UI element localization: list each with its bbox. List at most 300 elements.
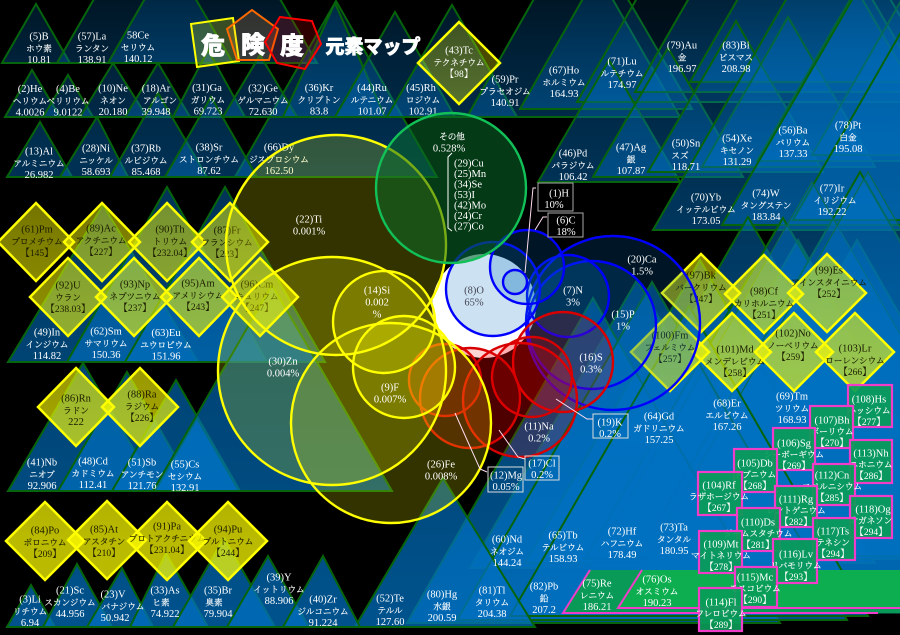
box: (113)Nh [850, 440, 892, 483]
triangle: (67)Ho [520, 0, 692, 109]
box: (106)Sg [764, 428, 824, 472]
diamond: (96)Cm [222, 258, 298, 336]
diamond: (99)Es: アインスタイニウム [791, 277, 867, 287]
box: (107)Bh: ボーリウム [811, 427, 853, 437]
title text: 元素マップ [325, 36, 421, 58]
label: (46)Pd: 106.42 [559, 172, 587, 183]
title badge: yellow square: 危 [201, 33, 225, 60]
callout: (17)Cl: 0.2% [531, 470, 553, 481]
callout: (12)Mg [455, 413, 523, 493]
label: (22)Ti: (22)Ti [296, 214, 322, 226]
label: 58Ce: セリウム [121, 42, 155, 52]
label: (64)Gd: 157.25 [645, 435, 673, 446]
diamond: (101)Md [693, 313, 771, 391]
diamond: (100)Fm [631, 313, 709, 391]
box: (111)Rg: 【282】 [779, 517, 813, 528]
triangle: (45)Rh [387, 5, 517, 117]
label: list of other elements: (53)I [454, 190, 475, 201]
diamond: (87)Fr: 【223】 [210, 249, 244, 260]
triangle: (71)Lu [577, 0, 900, 102]
label: other: 0.528% [433, 144, 465, 154]
label: other: その他 [439, 130, 465, 142]
label: (3)Li: 6.94 [21, 618, 40, 629]
box: (108)Hs [848, 385, 892, 428]
label: (72)Hf: 178.49 [608, 550, 636, 561]
diamond: (88)Ra [102, 368, 178, 446]
label: (70)Yb: 173.05 [692, 216, 720, 227]
diamond: (96)Cm: キュリウム [236, 291, 278, 301]
diamond: (101)Md: 【258】 [718, 368, 752, 379]
box: (108)Hs: ハッシウム [848, 406, 890, 416]
triangle: (74)W [722, 0, 900, 225]
label: (5)B: 10.81 [27, 55, 51, 66]
label: (2)He: 4.0026 [16, 108, 44, 119]
label: (23)V: 50.942 [101, 613, 129, 624]
callout: (12)Mg: (12)Mg [490, 470, 523, 482]
diamond: (99)Es [788, 254, 867, 332]
triangle: (13)Al [7, 122, 72, 177]
box: (112)Cn: (112)Cn [815, 470, 850, 482]
triangle: (72)Hf [585, 218, 900, 559]
label: (65)Tb: (65)Tb [548, 530, 578, 542]
diamond: (92)U: (92)U [55, 280, 81, 292]
label: (73)Ta: タンタル [657, 534, 691, 544]
triangle: small overlap [155, 418, 239, 491]
label: (82)Pb: 鉛 [540, 592, 549, 603]
diamond: (103)Lr [816, 313, 894, 391]
diamond: (85)At: 【210】 [87, 548, 121, 559]
label: (23)V: バナジウム [102, 601, 144, 611]
box: (115)Mc [729, 567, 781, 607]
label: (47)Ag: (47)Ag [616, 142, 647, 154]
label: (47)Ag: 107.87 [617, 166, 645, 177]
box: (111)Rg: レントゲニウム [766, 506, 826, 516]
label: (80)Hg: 水銀 [433, 600, 451, 611]
label: (68)Er: エルビウム [706, 410, 748, 420]
callout: (17)Cl: (17)Cl [528, 458, 556, 470]
label: (76)Os: オスミウム [636, 586, 678, 596]
diamond: (43)Tc [418, 22, 500, 104]
label: (22)Ti: 0.001% [293, 226, 325, 238]
label: (21)Sc: スカンジウム [44, 597, 96, 607]
box: (118)Og: (118)Og [855, 504, 891, 516]
triangle: (82)Pb [510, 306, 868, 616]
label: (59)Pr: 140.91 [491, 98, 519, 109]
label: (77)Ir: 192.22 [818, 207, 846, 218]
circle: (7)N [527, 255, 609, 337]
label: (38)Sr: 87.62 [197, 166, 221, 177]
box: (113)Nh: (113)Nh [853, 448, 889, 460]
circles red [409, 312, 613, 457]
label: (20)Ca: 1.5% [631, 266, 653, 278]
box: (118)Og: オガネソン [850, 516, 892, 526]
diamond: (85)At: (85)At [90, 524, 118, 536]
label: (44)Ru: 101.07 [358, 107, 386, 118]
label: (52)Te: (52)Te [376, 594, 404, 604]
circle: other elements [376, 113, 526, 263]
label: (57)La: ランタン [75, 43, 109, 53]
triangle: (44)Ru [335, 12, 455, 117]
label: (18)Ar: 39.948 [142, 107, 170, 118]
triangle: (54)Xe [702, 17, 875, 167]
label: (59)Pr: プラセオジム [479, 86, 531, 96]
label: (45)Rh: ロジウム [406, 95, 440, 105]
label: (51)Sb: 121.76 [128, 481, 156, 492]
triangle: (41)Nb [8, 363, 158, 491]
circle: (1)H [503, 270, 527, 294]
circle: (11)Na [463, 343, 577, 457]
label: (39)Y: イットリウム [253, 584, 305, 594]
label: (76)Os: (76)Os [642, 574, 672, 586]
label: (15)P: (15)P [611, 310, 635, 320]
label: (68)Er: 167.26 [713, 422, 741, 433]
label: (10)Ne: ネオン [100, 95, 126, 105]
diamond: (86)Rn: (86)Rn [61, 394, 92, 404]
label: (50)Sn: (50)Sn [672, 138, 701, 150]
diamond: (102)No: ノーベリウム [767, 340, 819, 350]
label: (83)Bi: 208.98 [722, 64, 750, 75]
diamond: (61)Pm: (61)Pm [21, 224, 53, 236]
circle labels [267, 130, 657, 482]
diamond: (90)Th: 【232.04】 [147, 248, 193, 259]
circles yellow [218, 135, 491, 523]
label: (54)Xe: キセノン [720, 145, 754, 155]
label: (75)Re: (75)Re [582, 578, 612, 590]
label: (63)Eu: 151.96 [152, 352, 180, 363]
label: (39)Y: 88.906 [265, 596, 293, 607]
circles blue [446, 230, 700, 410]
circle: (14)Si [333, 271, 435, 373]
triangle: (60)Nd [470, 280, 804, 568]
triangle: (51)Sb [112, 380, 240, 491]
triangle: (2)He [5, 70, 60, 117]
triangle: (65)Tb [525, 260, 875, 563]
triangle: (55)Cs [153, 285, 392, 491]
label: (13)Al: (13)Al [25, 146, 53, 158]
diamond: (84)Po: ポロニウム [24, 537, 66, 547]
circle: white disc behind oxygen [432, 254, 536, 358]
triangle: (35)Br [173, 538, 275, 627]
box: (110)Ds [724, 508, 792, 551]
triangle: (46)Pd [538, 60, 680, 182]
box: (107)Bh: (107)Bh [814, 416, 850, 426]
label: (80)Hg: 200.59 [428, 613, 456, 624]
label: (48)Cd: 112.41 [79, 480, 107, 491]
triangle: (76)Os upper part [618, 172, 900, 608]
box: (109)Mt [691, 531, 751, 573]
label: (72)Hf: ハフニウム [601, 538, 643, 548]
circle: (8)O [446, 242, 540, 336]
label: (67)Ho: 164.93 [550, 89, 578, 100]
label: (32)Ge: 72.630 [249, 107, 277, 118]
label: (74)W: (74)W [752, 188, 780, 200]
diamond: (94)Pu: プルトニウム [203, 536, 253, 546]
label: (66)Dy: ジスプロシウム [249, 154, 309, 164]
triangle: (77)Ir [793, 0, 900, 220]
label: (69)Tm: (69)Tm [776, 392, 808, 402]
diamond: (89)Ac: 【227】 [84, 247, 118, 258]
diamond: (100)Fm: (100)Fm [652, 330, 688, 342]
label: (32)Ge: (32)Ge [248, 84, 278, 94]
label: (77)Ir: (77)Ir [820, 184, 845, 194]
label: (70)Yb: イッテルビウム [676, 204, 736, 214]
label: (46)Pd: (46)Pd [559, 148, 588, 160]
triangle: (83)Bi [690, 0, 900, 82]
label: (28)Ni: ニッケル [79, 155, 113, 165]
diamond: (90)Th: トリウム [153, 236, 187, 246]
box: (104)Rf: 【267】 [702, 503, 736, 514]
diamond: (85)At [68, 501, 146, 579]
label: (31)Ga: ガリウム [191, 95, 225, 105]
triangle: (28)Ni [60, 117, 128, 177]
diamond: (93)Np: ネプツニウム [109, 291, 161, 301]
diamond: (92)U: ウラン [55, 292, 81, 302]
triangle: (23)V [87, 568, 153, 627]
label: (31)Ga: (31)Ga [192, 83, 222, 94]
triangle: (59)Pr [467, 0, 680, 117]
diamond: (97)Bk: 【247】 [684, 294, 718, 305]
triangle: (10)Ne [80, 63, 147, 117]
label: (63)Eu: (63)Eu [151, 328, 181, 339]
label: 58Ce: 140.12 [124, 54, 152, 65]
label: (23)V: (23)V [100, 590, 126, 600]
callout: (1)H: (1)H [549, 188, 569, 200]
label: (79)Au: (79)Au [667, 40, 698, 52]
triangle: (81)Tl [457, 282, 847, 620]
box: (113)Nh: 【286】 [854, 471, 888, 482]
triangle: (68)Er [686, 240, 900, 437]
diamond: (43)Tc: (43)Tc [445, 46, 473, 56]
label: (65)Tb: 158.93 [549, 554, 577, 565]
label: (36)Kr: (36)Kr [305, 83, 334, 94]
diamond: (98)Cf: カリホルニウム [734, 298, 794, 308]
diamond: (102)No: 【259】 [776, 352, 810, 363]
diamond: (86)Rn: ラドン [63, 405, 89, 415]
label: list of other elements: (42)Mo [454, 200, 486, 212]
box: (107)Bh: 【270】 [815, 438, 849, 449]
pink boxes layer [689, 385, 892, 631]
label: (5)B: (5)B [29, 32, 49, 42]
label: (67)Ho: (67)Ho [549, 66, 579, 76]
label: (78)Pt: 白金 [839, 131, 857, 142]
label: (74)W: 183.84 [752, 212, 781, 223]
label: (66)Dy: 162.50 [265, 166, 293, 177]
label: (81)Tl: タリウム [475, 597, 509, 607]
label: (81)Tl: (81)Tl [479, 586, 505, 596]
diamond: (89)Ac: アクチニウム [76, 235, 126, 245]
label: (62)Sm: 150.36 [92, 350, 120, 361]
circle: (20)Ca [526, 236, 700, 410]
label: (69)Tm: 168.93 [778, 415, 806, 426]
triangle: (38)Sr [165, 97, 257, 177]
diamond: (99)Es: (99)Es [815, 266, 843, 276]
box: (116)Lv: 【293】 [779, 572, 813, 583]
box: (117)Ts: テネシン [816, 538, 850, 548]
title badge: orange pentagon [227, 10, 278, 60]
label: (51)Sb: (51)Sb [128, 458, 156, 468]
box: (105)Db: (105)Db [737, 458, 773, 470]
label: (48)Cd: カドミウム [72, 468, 114, 478]
label: list of other elements: (34)Se [454, 180, 482, 190]
box: (110)Ds: (110)Ds [741, 518, 775, 528]
label: (80)Hg: (80)Hg [427, 590, 458, 600]
diamond: (94)Pu: (94)Pu [214, 524, 243, 536]
callout: (17)Cl [499, 430, 559, 481]
label: (35)Br: 臭素 [205, 596, 223, 607]
triangle: (49)In [8, 205, 198, 362]
label: (56)Ba: (56)Ba [778, 126, 808, 136]
diamond: (86)Rn: 222 [68, 417, 84, 428]
diamond: (43)Tc: テクネチウム [433, 57, 485, 67]
label: (37)Rb: ルビジウム [125, 155, 167, 165]
diamond: (61)Pm [0, 203, 74, 281]
label: (60)Nd: ネオジム [490, 546, 524, 556]
label: (41)Nb: ニオブ [29, 469, 55, 479]
box: (104)Rf: ラザホージウム [689, 492, 749, 502]
label: (60)Nd: 144.24 [493, 558, 522, 569]
diamond: (88)Ra: (88)Ra [127, 390, 157, 400]
label: (76)Os: 190.23 [643, 598, 671, 609]
box: (115)Mc: 【290】 [738, 595, 772, 606]
label: (18)Ar: アルゴン [143, 95, 177, 105]
diamond: (93)Np: (93)Np [120, 280, 150, 290]
diamond: (91)Pa [128, 502, 206, 580]
label: (14)Si: (14)Si [364, 286, 390, 296]
label: (28)Ni: (28)Ni [82, 144, 110, 154]
box: (106)Sg: シーボーギウム [764, 450, 824, 460]
triangle: (33)As [130, 553, 208, 627]
label: (2)He: ヘリウム [13, 96, 47, 106]
box: (109)Mt: マイトネリウム [691, 551, 751, 561]
label: (55)Cs: 132.91 [171, 483, 199, 494]
label: (11)Na: 0.2% [528, 434, 550, 444]
label: (45)Rh: 102.91 [409, 107, 437, 118]
circle: (26)Fe [291, 323, 491, 523]
triangle: (36)Kr [283, 3, 385, 117]
label: (7)N: (7)N [563, 286, 583, 296]
label: (30)Zn: (30)Zn [268, 356, 298, 368]
diamond: (91)Pa: プロトアクチニウム [129, 533, 205, 543]
label: (56)Ba: 137.33 [779, 149, 807, 160]
callout: (1)H: 10% [544, 200, 564, 211]
diamond: (61)Pm: 【145】 [20, 248, 54, 259]
diamond: (103)Lr: (103)Lr [839, 344, 872, 354]
triangle: (39)Y [227, 556, 309, 627]
triangle: (4)Be [43, 75, 93, 117]
diamond: (95)Am: 【243】 [181, 302, 215, 313]
label: (16)S: (16)S [579, 352, 603, 364]
triangle: (48)Cd [58, 372, 195, 491]
box: (113)Nh: ニホニウム [850, 460, 892, 470]
label: (62)Sm: サマリウム [85, 338, 127, 348]
label: (44)Ru: (44)Ru [357, 83, 388, 94]
box: (109)Mt: 【278】 [704, 562, 738, 573]
diamond: (95)Am [161, 258, 237, 336]
box: (108)Hs: 【277】 [852, 417, 886, 428]
label: (70)Yb: (70)Yb [691, 192, 721, 204]
triangle: (56)Ba [757, 0, 900, 161]
diamond: (95)Am: (95)Am [181, 278, 215, 290]
label: (78)Pt: 195.08 [834, 144, 862, 155]
diamond: (84)Po: 【209】 [28, 549, 62, 560]
diamond: (95)Am: アメリシウム [173, 290, 223, 300]
diamond: (43)Tc: 【98】 [445, 69, 473, 80]
triangle: (47)Ag [593, 48, 743, 177]
box: (111)Rg: (111)Rg [779, 494, 814, 506]
box: (106)Sg: 【269】 [777, 461, 811, 472]
label: (66)Dy: (66)Dy [264, 142, 295, 154]
diamond: (98)Cf [725, 255, 803, 333]
diamond: (102)No [755, 313, 833, 391]
diamond: (89)Ac: (89)Ac [86, 224, 116, 234]
triangle: (40)Zr [283, 556, 360, 627]
callout: (19)K: 0.2% [599, 429, 621, 440]
triangle: (63)Eu [125, 187, 325, 362]
label: (13)Al: アルミニウム [13, 158, 65, 168]
triangle: (73)Ta [638, 172, 900, 556]
box: (104)Rf [689, 472, 749, 515]
title badge: orange pentagon: 険 [241, 32, 265, 59]
triangle: (58)Ce [108, 0, 233, 63]
circle: (12)Mg [420, 348, 520, 448]
label: (52)Te: テルル [377, 605, 403, 615]
box: (118)Og [850, 496, 892, 538]
label: (40)Zr: 91.224 [309, 618, 338, 629]
label: (79)Au: 196.97 [668, 64, 696, 75]
label: (69)Tm: ツリウム [775, 403, 809, 413]
box: (109)Mt: (109)Mt [704, 540, 739, 550]
label: (31)Ga: 69.723 [194, 107, 222, 118]
box: (106)Sg: (106)Sg [777, 438, 812, 450]
label: (39)Y: (39)Y [266, 572, 292, 584]
diamond: (94)Pu [189, 502, 267, 580]
box: (105)Db: 【268】 [738, 481, 772, 492]
box: (107)Bh [810, 406, 853, 449]
diamond: (91)Pa: (91)Pa [153, 522, 181, 532]
triangle: (32)Ge [223, 55, 297, 117]
label: (83)Bi: (83)Bi [722, 40, 750, 52]
label: (7)N: 3% [566, 298, 580, 308]
circle: (17)Cl [492, 337, 572, 417]
label: (49)In: インジウム [26, 339, 68, 349]
circle: (6)C [490, 230, 564, 304]
diamond: (100)Fm: 【257】 [653, 354, 687, 365]
circle: (9)F [353, 316, 455, 418]
box: (117)Ts: (117)Ts [817, 526, 849, 538]
label: (4)Be: (4)Be [56, 84, 80, 95]
label: (82)Pb: 207.2 [532, 605, 556, 616]
label: (10)Ne: (10)Ne [98, 84, 128, 94]
circle: (15)P [528, 261, 656, 389]
triangle: (31)Ga [173, 50, 245, 117]
box: (115)Mc: (115)Mc [737, 572, 774, 584]
label: (48)Cd: (48)Cd [78, 456, 109, 468]
label: (2)He: (2)He [18, 84, 43, 95]
circle: (22)Ti [226, 135, 446, 355]
box: (111)Rg [766, 486, 826, 528]
label: (38)Sr: (38)Sr [196, 142, 223, 154]
box: (115)Mc: モスコビウム [729, 584, 781, 594]
callout: (6)C: (6)C [556, 216, 576, 226]
label: (30)Zn: 0.004% [267, 368, 299, 380]
box: (110)Ds: 【281】 [741, 540, 775, 551]
label: list of other elements: (25)Mn [454, 169, 487, 180]
label: (40)Zr: ジルコニウム [297, 606, 349, 616]
label: (16)S: 0.3% [580, 364, 602, 376]
diamond: (84)Po [6, 502, 84, 580]
triangle: (21)Sc [43, 564, 112, 627]
box: (114)Fl: (114)Fl [705, 598, 737, 608]
